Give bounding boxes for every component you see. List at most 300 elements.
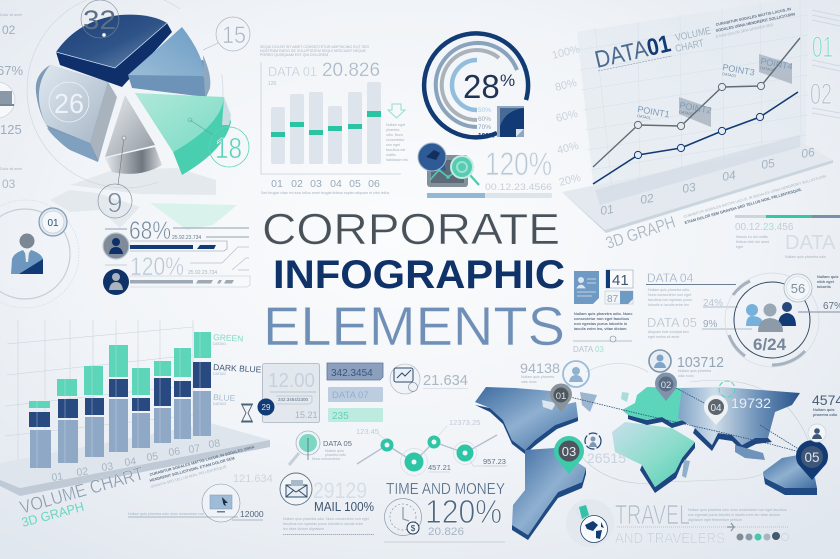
australia <box>763 455 817 495</box>
x labels <box>599 145 816 218</box>
icon: clock <box>384 498 422 536</box>
icon: down arrow <box>388 104 405 118</box>
pin 04 <box>704 395 728 425</box>
side note: Nullam eget <box>386 123 405 127</box>
caption: Nullam quis <box>817 275 839 279</box>
leader lines <box>702 307 752 329</box>
point sublabels <box>637 66 774 120</box>
caption: eget <box>736 245 743 249</box>
icon: globe bubble <box>418 143 446 171</box>
dotted rule <box>617 526 788 528</box>
africa <box>612 422 695 493</box>
x labels: 07 <box>188 442 201 456</box>
heading TRAVEL: TRAVEL <box>615 499 690 530</box>
legend: DATA03 <box>213 402 226 406</box>
title <box>262 205 565 357</box>
x labels: 03 <box>310 178 322 190</box>
pin 01 <box>550 383 572 412</box>
panel: time and money <box>384 481 505 542</box>
point sublabels: DATA02 <box>679 110 693 116</box>
caption <box>312 449 346 461</box>
caption: Nullam quis pharetra odio nunc consectetur non eget faucibus <box>688 508 787 512</box>
ring: grey <box>442 50 499 120</box>
x labels: 04 <box>721 168 737 184</box>
column 04 <box>328 106 342 164</box>
caption <box>736 235 826 259</box>
column 03 <box>84 366 104 457</box>
side note: odio. Nunc <box>386 133 403 137</box>
slice: grey <box>105 95 162 174</box>
caption: HENDRERIT SOLLICITUDIN. ETIAM DOLOR SEM <box>149 456 235 483</box>
panel: data 04 05 <box>646 271 752 339</box>
percent sign: % <box>500 71 515 90</box>
navy markers <box>634 113 764 159</box>
value 12.00: 12.00 <box>268 370 315 392</box>
icon: magnifier <box>451 156 479 185</box>
y labels <box>551 43 582 189</box>
value 120%: 120% <box>130 253 184 281</box>
badge 01: 01 <box>47 218 59 229</box>
pin 03 <box>554 436 584 474</box>
badge 56: 56 <box>791 281 805 296</box>
series: navy line <box>593 92 798 184</box>
icon: plane <box>727 523 735 531</box>
value 26515: 26515 <box>587 450 626 466</box>
panel: world map <box>475 350 840 540</box>
icon: dashboard <box>427 155 468 187</box>
caption: finibus nibh dui amet <box>736 240 769 244</box>
caption: Nullam quis pharetra <box>678 369 711 373</box>
x labels: 01 <box>599 202 615 218</box>
label 15: 15 <box>222 22 246 49</box>
left edge fragments <box>0 13 23 191</box>
caption: Mauris eu dui mollis <box>736 235 768 239</box>
europe <box>621 387 692 428</box>
bars <box>271 82 381 164</box>
progress bar <box>130 241 227 251</box>
axes <box>261 62 401 174</box>
label DATA 05: DATA 05 <box>647 315 697 330</box>
caption: odio nunc <box>678 374 694 378</box>
caption: odio nunc <box>521 380 537 384</box>
value 28%: 28 <box>463 68 500 105</box>
icon: document <box>497 106 524 137</box>
value 20.826: 20.826 <box>322 60 380 81</box>
ELEMENTS: ELEMENTS <box>263 295 565 357</box>
value 120%: 120% <box>485 146 552 182</box>
x labels: 08 <box>208 437 221 451</box>
paragraph <box>648 330 689 339</box>
legend: 50% <box>478 107 491 114</box>
leader <box>798 311 840 313</box>
caption <box>715 7 796 39</box>
mini pins <box>736 532 788 540</box>
paragraph: faucibus non egestas purus <box>648 298 692 302</box>
point sublabels: DATA03 <box>722 72 736 78</box>
label 457.21: 457.21 <box>428 463 451 472</box>
icon: people <box>746 302 796 332</box>
caption: Nullam quis <box>325 449 344 453</box>
caption: pharetra odio <box>813 413 838 417</box>
line <box>357 435 497 464</box>
panel: 3D line graph <box>551 0 833 253</box>
value 6/24: 6/24 <box>753 335 787 354</box>
grey markers <box>634 82 765 130</box>
value 02: 02 <box>2 23 16 37</box>
value: 00.12.23.456 <box>735 222 794 233</box>
label DATA 05: DATA 05 <box>323 439 352 448</box>
paragraph <box>648 288 692 307</box>
markers <box>380 436 474 472</box>
caption: non egestas purus lobortis in iaculis enim leo vitae dictum <box>688 513 780 517</box>
legend <box>213 332 262 406</box>
caption: GRAVIDA SED TELLUS NON, PELLENTESQUE. <box>150 465 228 489</box>
avatar 05 <box>808 424 826 442</box>
label 15 <box>203 17 250 51</box>
x labels: 05 <box>349 178 361 190</box>
value date: 25.92.23.734 <box>172 235 201 241</box>
x labels: 04 <box>330 178 342 190</box>
pin 03: 03 <box>562 444 576 459</box>
caption <box>678 369 711 378</box>
caption: PORRO QUISQUAM EST QUI DOLOREM <box>260 53 328 57</box>
side note: consectetur <box>386 138 405 142</box>
icon: magnifier <box>289 431 320 465</box>
paragraph: eget metus sit amet <box>648 335 679 339</box>
label DATA 04: DATA 04 <box>647 271 694 285</box>
icon: globe <box>580 516 608 542</box>
legend <box>478 107 495 140</box>
legend: 100% <box>478 132 495 140</box>
badge 29: 29 <box>262 403 271 412</box>
heading: TIME AND MONEY <box>386 481 505 498</box>
icon: dollar badge: $ <box>411 524 416 533</box>
side note <box>386 123 408 162</box>
pointer <box>307 438 309 460</box>
back wall <box>577 0 808 200</box>
paragraph: lobortis in iaculis enim leo <box>648 303 689 307</box>
pin 01: 01 <box>556 391 566 402</box>
point labels: POINT4 <box>760 56 793 72</box>
halo <box>400 442 476 476</box>
icon: mini clock <box>408 382 418 392</box>
panel: data 05 magnifier <box>289 431 352 465</box>
caption: ETIAM DOLOR SEM GRAVIDA SED <box>715 23 774 39</box>
value 68%: 68% <box>129 217 171 245</box>
value 121.634: 121.634 <box>233 473 273 485</box>
column 07 <box>174 348 191 439</box>
title 3D GRAPH: 3D GRAPH <box>603 212 678 253</box>
asia <box>678 387 800 460</box>
caption: SEQUI DOLOR SIT AMET CONSECTETUR ADIPISCING ELIT SED <box>260 45 369 49</box>
caption: ETIAM DOLOR SEM GRAVIDA SED TELLUS NON, PELLENTESQUE. <box>684 188 802 225</box>
title DATA01: DATA01 <box>592 30 673 74</box>
x labels: 02 <box>76 465 89 479</box>
y labels: 60% <box>555 108 579 125</box>
x labels: 06 <box>368 178 380 190</box>
point labels: POINT3 <box>722 62 755 78</box>
footnote: Sed feugiat vitae mi nunc tellus amet feugiat finibus sapien aliquam et nibh tellus <box>261 191 389 195</box>
caption: dignissim eget fermentum pretium <box>688 518 742 522</box>
column 05 <box>348 92 362 164</box>
paragraph: non egestas purus lobortis in <box>574 322 628 326</box>
legend: 60% <box>478 116 491 123</box>
value 19732: 19732 <box>731 395 771 411</box>
column 02 <box>57 379 78 463</box>
pie shadow <box>50 168 237 230</box>
value 03: 03 <box>2 177 16 191</box>
grid <box>577 0 808 190</box>
x labels: 01 <box>271 178 283 190</box>
floor <box>0 423 270 496</box>
column 04 <box>109 345 128 452</box>
slice: navy <box>56 15 172 87</box>
card <box>262 364 320 422</box>
value 125: 125 <box>0 122 22 137</box>
icon: avatar <box>103 269 129 295</box>
y labels: 80% <box>554 77 578 94</box>
caption: Nullam quis pharetra odio <box>785 255 826 259</box>
panel: bar chart data 01 <box>260 45 408 195</box>
label MAIL 100%: MAIL 100% <box>314 500 374 514</box>
small value: 342.3454/2300 <box>278 397 309 402</box>
paragraph: leo vitae dictum dignissim <box>283 527 324 531</box>
pin divider <box>573 336 632 342</box>
side note: non eget <box>386 143 400 147</box>
point labels <box>637 56 793 120</box>
caption: CURABITUR SODALES MATTIS LACUS, IN <box>715 7 792 27</box>
route arcs <box>580 364 808 483</box>
side note: habitasse mis <box>386 158 408 162</box>
legend: DARK BLUE <box>213 362 262 375</box>
ring: navy <box>424 33 528 137</box>
paragraph: Nullam quis pharetra odio. Nunc <box>574 312 632 316</box>
value 21.634: 21.634 <box>423 372 468 389</box>
panel: progress 120% <box>103 247 250 295</box>
label 9 <box>98 136 132 218</box>
legend: BLUE <box>213 392 236 403</box>
column 06 <box>367 82 381 164</box>
icon: small globe <box>576 504 590 519</box>
x labels: 02 <box>291 178 303 190</box>
madagascar <box>682 460 690 478</box>
ring <box>390 364 420 394</box>
subtitle: VOLUME <box>674 26 712 44</box>
title 3D GRAPH: 3D GRAPH <box>20 499 86 530</box>
icon: envelope <box>286 480 307 497</box>
panel: team 6/24 <box>725 273 840 367</box>
point labels: POINT2 <box>679 100 712 116</box>
north america <box>475 387 578 454</box>
caption <box>817 275 839 289</box>
rings <box>725 273 819 367</box>
value 15.21: 15.21 <box>295 410 318 420</box>
paragraph: Nullam quis pharetra odio. Nunc consectetur non eget <box>283 517 369 521</box>
value date: 25.92.23.734 <box>188 270 217 276</box>
caption: CURABITUR SODALES MATTIS LACUS, IN SODALES URNA <box>149 445 255 477</box>
tiny caption: Dolor sit amet <box>0 167 22 171</box>
caption: Nullam quis pharetra <box>521 375 554 379</box>
point labels: POINT1 <box>637 104 670 120</box>
label 32: 32 <box>83 5 116 35</box>
x labels: 04 <box>124 455 137 469</box>
leaders <box>378 426 507 472</box>
side note: mattis <box>386 153 396 157</box>
point sublabels: DATA01 <box>637 114 651 120</box>
pin 05 <box>796 440 828 480</box>
icon: avatar <box>103 233 129 259</box>
wall shadow bars <box>595 135 800 205</box>
avatar 26515 <box>585 433 601 449</box>
panel: 3D volume chart <box>0 320 270 530</box>
panel: monitor 12000 <box>128 473 273 522</box>
series: grey line <box>593 38 800 167</box>
x labels <box>271 178 380 190</box>
badge <box>719 381 735 397</box>
value 24%: 24% <box>703 298 723 309</box>
icon: laptop <box>0 82 15 118</box>
x labels: 06 <box>168 445 181 459</box>
panel: right edge data <box>810 10 840 118</box>
caption <box>688 508 787 522</box>
dashed rule <box>283 534 374 536</box>
caption: Nunc consectetur <box>312 457 341 461</box>
column 01 <box>271 107 285 164</box>
ring: light blue <box>452 60 477 110</box>
label data 01: DATA 01 <box>268 64 317 79</box>
label 18: 18 <box>215 133 242 165</box>
paragraph: iaculis enim leo, vitae dictum <box>574 327 627 331</box>
panel: mail <box>280 473 374 534</box>
avatar 94138 <box>563 361 589 387</box>
slice: left light blue <box>36 65 117 162</box>
label 957.23: 957.23 <box>483 457 506 466</box>
label DATA 03: DATA 03 <box>573 345 604 354</box>
column 06 <box>154 361 171 443</box>
value 12000: 12000 <box>240 509 264 519</box>
decorative lines <box>812 10 840 118</box>
side note: faucibus est <box>386 148 405 152</box>
tiny caption: Dolor sit amet <box>0 13 22 17</box>
value 120%: 120% <box>425 493 502 530</box>
panel: person badge 01 <box>0 200 79 308</box>
x labels: 06 <box>800 145 816 161</box>
rule <box>384 541 505 543</box>
pin 04: 04 <box>710 403 722 414</box>
label 18 <box>188 118 249 167</box>
value 103712: 103712 <box>677 354 724 371</box>
x labels: 05 <box>146 450 159 464</box>
progress bar <box>427 193 552 198</box>
caption <box>521 375 554 384</box>
heading AND TRAVELERS: AND TRAVELERS <box>615 530 725 547</box>
caption: lobortis <box>817 285 831 289</box>
subtitle <box>674 26 712 55</box>
value 29129: 29129 <box>313 478 367 503</box>
icon: businessman <box>11 234 43 274</box>
value 87: 87 <box>607 294 619 305</box>
label 32 <box>81 0 119 38</box>
x labels: 01 <box>51 470 64 484</box>
dotted routes <box>570 388 800 452</box>
paragraph: consectetur non eget faucibus <box>574 317 629 321</box>
slice: blue <box>128 27 210 97</box>
y labels: 100% <box>551 43 581 62</box>
dashed rule <box>598 56 672 71</box>
progress bar <box>130 276 250 287</box>
caption: SODALES URNA HENDRERIT SOLLICITUDIN <box>715 12 796 33</box>
rule <box>270 391 316 393</box>
icon: document <box>574 271 599 304</box>
point sublabels: DATA04 <box>760 66 774 72</box>
column 02 <box>290 94 304 164</box>
column 03 <box>309 92 323 164</box>
caption: NOSTRUM RATIO DE VOLUPTATEM SEQUI NESCIUNT NEQUE <box>260 49 367 53</box>
INFOGRAPHIC: INFOGRAPHIC <box>273 253 565 297</box>
title VOLUME CHART: VOLUME CHART <box>17 462 146 518</box>
icon: chart <box>394 368 413 382</box>
outer guide ring <box>27 0 223 188</box>
paragraph: Aliquam erat volutpat sed <box>648 330 689 334</box>
pin 02: 02 <box>661 380 671 391</box>
point tags <box>679 54 792 127</box>
y labels: 40% <box>556 140 580 157</box>
legend: DATA02 <box>213 372 226 376</box>
value 94138: 94138 <box>520 360 560 376</box>
CORPORATE: CORPORATE <box>262 205 560 254</box>
panel: data 00.12.23.456 <box>735 215 840 259</box>
panel: teal line chart <box>356 418 507 476</box>
pin 02 <box>655 372 677 401</box>
side note: pharetra <box>386 128 399 132</box>
paragraph: faucibus non egestas purus lobortis in iaculis enim <box>283 522 363 526</box>
column highlights <box>37 332 200 468</box>
value 9%: 9% <box>703 319 718 330</box>
label 26: 26 <box>54 88 84 119</box>
y labels: 20% <box>558 172 582 189</box>
label 9: 9 <box>107 187 123 218</box>
panel: value 21.634 <box>390 364 468 394</box>
ring <box>202 484 240 522</box>
panel: travel and travelers <box>566 499 788 547</box>
floor <box>562 143 833 233</box>
grid <box>5 320 193 460</box>
label 12373.25: 12373.25 <box>449 418 480 427</box>
panel: value buttons <box>327 363 383 422</box>
decorative lines <box>105 228 249 237</box>
legend: 70% <box>478 124 491 131</box>
caption: Nullam quis pharetra odio nunc consectetur non <box>128 512 204 516</box>
caption: Nullam quis <box>813 408 835 412</box>
rule <box>646 284 736 286</box>
value 20.826: 20.826 <box>428 526 464 538</box>
rule <box>128 517 263 520</box>
slice: teal <box>135 93 231 175</box>
ring: blue grey <box>436 43 517 127</box>
column 08 <box>193 332 211 436</box>
panel: progress 68% <box>103 217 249 259</box>
paragraph: Nullam quis pharetra odio. <box>648 288 690 292</box>
panel: clock 12.00 card <box>258 364 320 422</box>
column 01 <box>29 401 51 468</box>
icon: monitor <box>210 495 232 512</box>
x labels: 05 <box>760 156 776 172</box>
rings <box>0 200 79 308</box>
value code: 00.12.23.4566 <box>485 182 552 193</box>
panel: document 41 87 <box>573 270 633 354</box>
icon: hourglass <box>241 404 253 422</box>
icon: badge disc <box>566 499 614 547</box>
